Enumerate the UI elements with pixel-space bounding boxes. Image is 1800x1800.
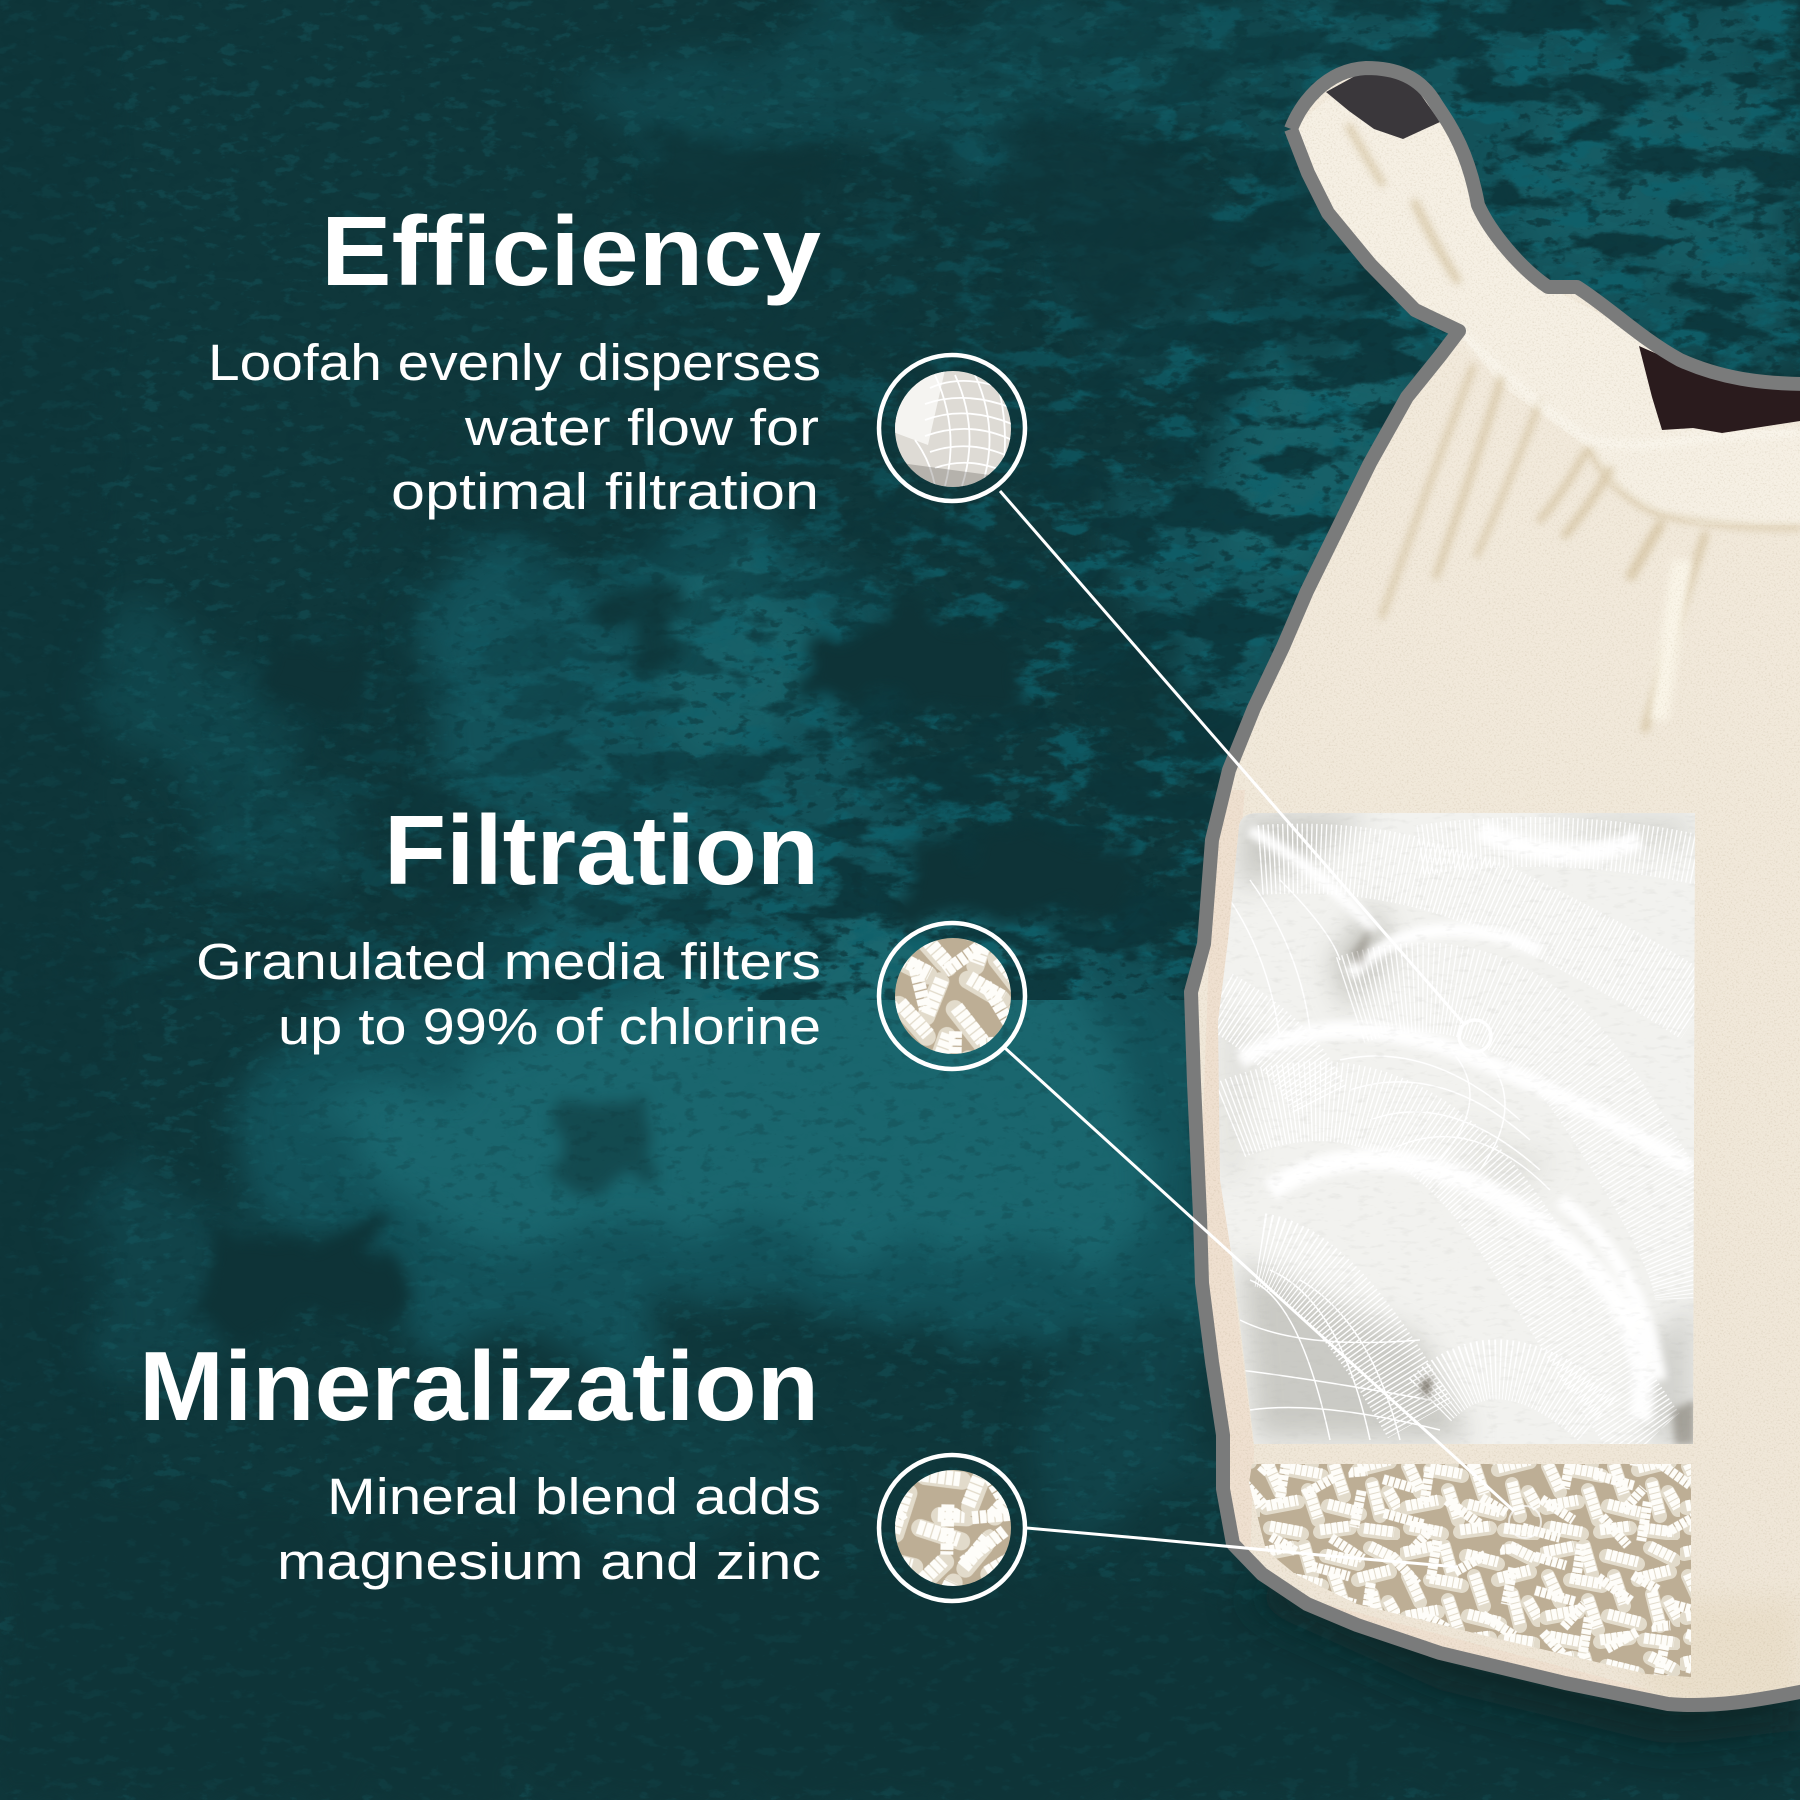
mesh strands xyxy=(1230,880,1550,1440)
text: efficiency description: Loofah evenly disperses xyxy=(208,334,821,391)
leader line to loofah xyxy=(1000,491,1464,1024)
cutaway: loofah window xyxy=(1210,810,1700,1450)
icon: granules magnifier xyxy=(879,923,1541,1538)
dark crevices xyxy=(1350,925,1695,1445)
mesh folds xyxy=(1218,842,1700,1440)
text: mineralization description: Mineral blend adds xyxy=(327,1468,821,1525)
icon: minerals magnifier xyxy=(879,1455,1458,1601)
text: mineralization description: magnesium and zinc xyxy=(277,1533,821,1590)
text: filtration description xyxy=(196,933,821,1055)
bag ground shadow xyxy=(1240,1560,1800,1745)
text: filtration description: up to 99% of chlorine xyxy=(278,998,821,1055)
callout: filtration xyxy=(196,795,821,1055)
icon: loofah magnifier xyxy=(879,355,1491,1052)
cutaway: mineral granules window xyxy=(1240,1460,1700,1685)
callout: mineralization xyxy=(139,1331,821,1590)
bag opening dark interior xyxy=(1639,346,1800,433)
callout: efficiency xyxy=(208,196,821,520)
heading: Filtration: Filtration xyxy=(384,795,819,905)
text: efficiency description xyxy=(208,334,821,520)
text: efficiency description: water flow for xyxy=(464,399,819,456)
gathered wrinkles xyxy=(1349,127,1800,729)
highlight fold xyxy=(1650,560,1692,720)
heading: Mineralization: Mineralization xyxy=(139,1331,819,1441)
leader line to minerals xyxy=(1026,1528,1458,1567)
text: mineralization description xyxy=(277,1468,821,1590)
bag cloth body xyxy=(1180,40,1800,1740)
heading: Efficiency: Efficiency xyxy=(321,196,821,306)
text: efficiency description: optimal filtration xyxy=(391,463,819,520)
leader line to granules xyxy=(1005,1048,1514,1511)
bright folds xyxy=(1240,830,1690,1420)
strap dark inner patch xyxy=(1326,70,1440,139)
strap band xyxy=(1472,327,1800,522)
product: cloth filter bag xyxy=(1180,40,1800,1740)
text: filtration description: Granulated media filters xyxy=(196,933,821,990)
bag outline xyxy=(1191,68,1800,1705)
